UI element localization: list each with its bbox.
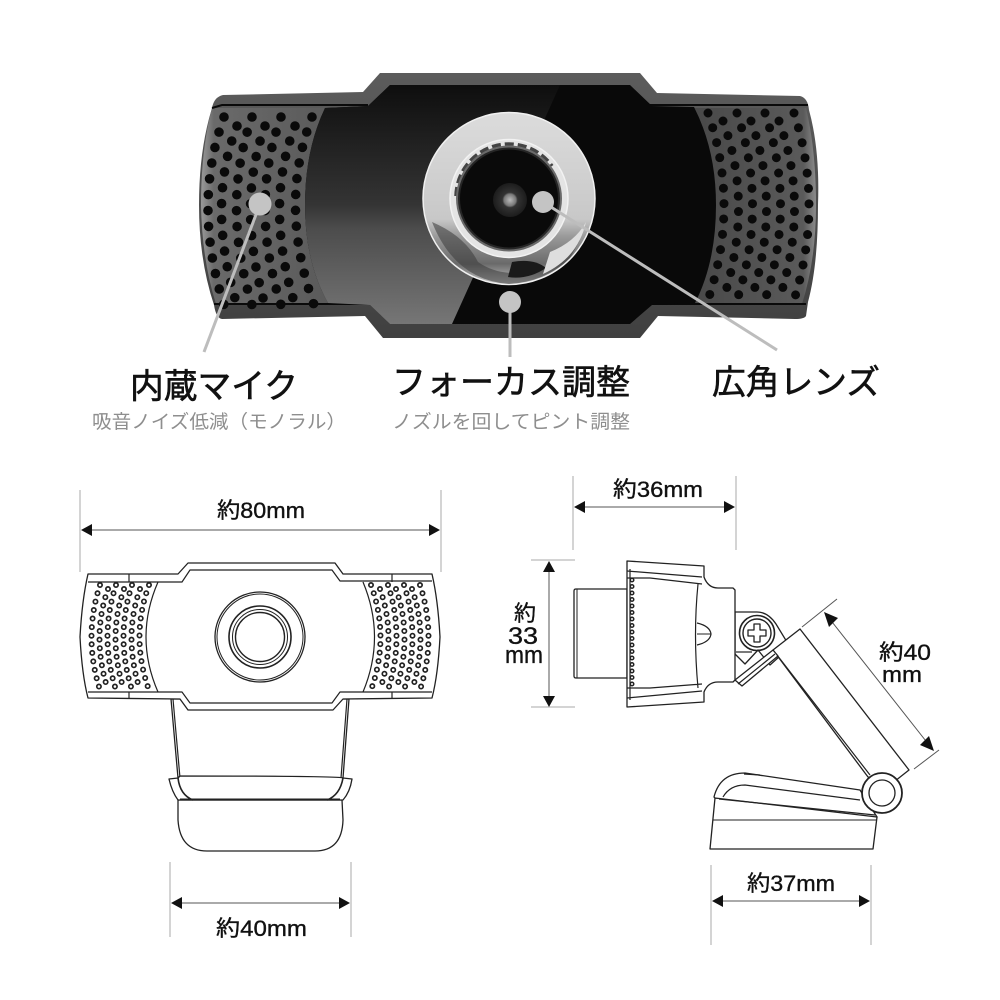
right speaker grille (690, 108, 816, 304)
stand neck (171, 699, 349, 778)
dimension: stand width 40mm: 約40mm (216, 916, 307, 941)
callout: focus adjustment: フォーカス調整 (392, 364, 630, 402)
arm (735, 629, 909, 785)
dimension: height 33mm: 33 (508, 623, 538, 650)
screw (740, 616, 774, 650)
lens circles (215, 592, 305, 682)
callout: built-in mic: 吸音ノイズ低減（モノラル） (92, 411, 346, 433)
left speaker holes (92, 585, 149, 690)
dimension: depth 36mm: 約36mm (613, 477, 703, 502)
marker dots (248, 191, 554, 313)
dimension: width 80mm (80, 490, 441, 572)
body details (627, 569, 711, 700)
dimension: width 80mm: 約80mm (217, 498, 305, 523)
line drawing: front view (80, 563, 440, 851)
callout: focus adjustment (392, 364, 630, 433)
camera body side (627, 561, 735, 707)
left speaker grille (201, 108, 330, 304)
inner panel outline (88, 570, 432, 703)
lens barrel (574, 589, 627, 678)
right speaker holes (708, 113, 809, 300)
callout: built-in mic (92, 368, 346, 433)
lens sensor (493, 183, 527, 217)
lens ring reflections (432, 222, 586, 284)
speaker panel edges (146, 582, 374, 692)
photo: webcam front view (199, 73, 818, 357)
lens glass (459, 148, 559, 248)
callout: focus adjustment: ノズルを回してピント調整 (392, 411, 630, 433)
glossy front panel (305, 85, 716, 324)
callout: built-in mic: 内蔵マイク (130, 368, 298, 406)
camera body outline (80, 563, 440, 710)
dimension: height 33mm (505, 560, 575, 707)
dimension: arm length 40mm (802, 599, 939, 769)
right speaker holes (371, 585, 428, 690)
base (710, 773, 877, 849)
dimension: base depth 37mm (711, 865, 871, 945)
dimension: height 33mm: 約 (514, 601, 536, 626)
dimension: height 33mm: mm (505, 642, 543, 669)
lens ring (423, 112, 595, 284)
panel reflection (305, 85, 560, 324)
dimension: arm length 40mm: mm (882, 662, 922, 687)
pivot (862, 773, 902, 813)
line drawing: side view (574, 561, 909, 849)
dimension: stand width 40mm (170, 862, 351, 941)
dimension: base depth 37mm: 約37mm (747, 871, 835, 896)
side speaker holes (630, 580, 634, 688)
webcam outer body (199, 73, 818, 338)
hinge bracket (735, 612, 790, 665)
left speaker holes (208, 117, 314, 305)
dimension: arm length 40mm: 約40 (879, 640, 931, 665)
marker lines (204, 202, 777, 357)
speaker seams (212, 105, 808, 304)
dimension: depth 36mm (573, 476, 736, 550)
chrome inner ring (450, 140, 568, 258)
callout: wide-angle lens: 広角レンズ (712, 364, 880, 402)
stand foot (169, 776, 352, 851)
